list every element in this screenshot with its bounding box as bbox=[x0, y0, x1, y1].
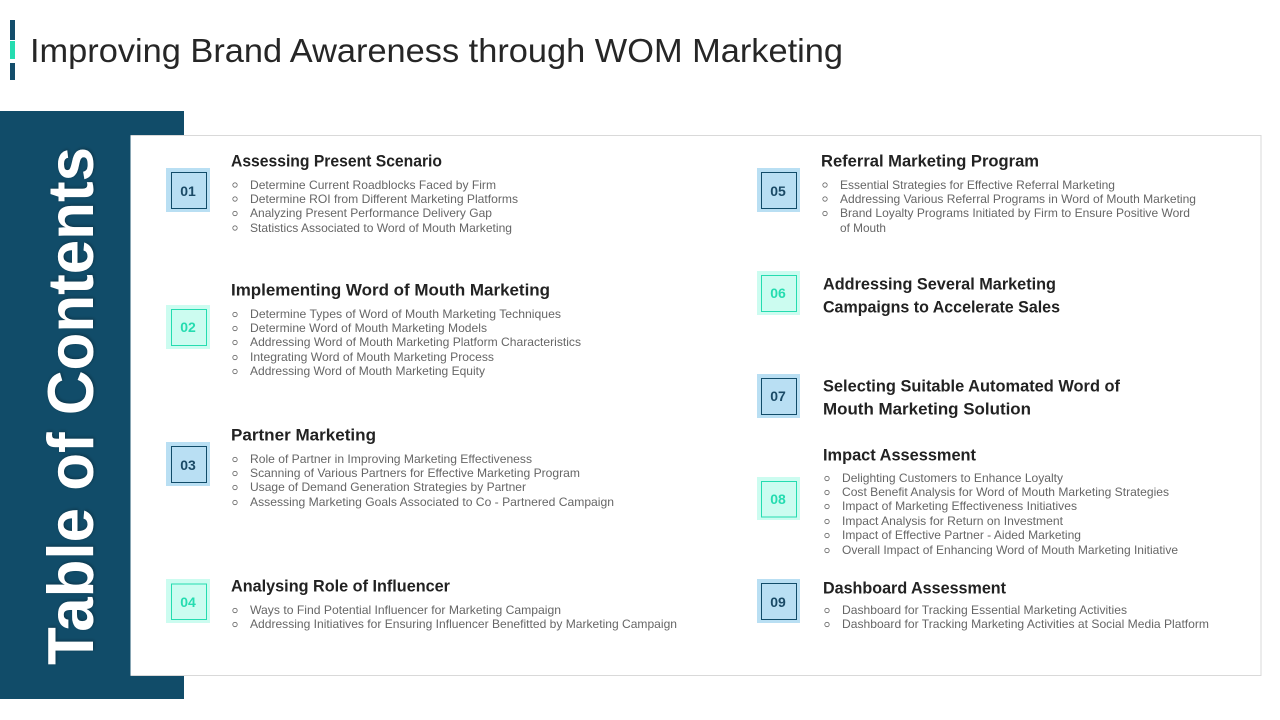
section 01 bbox=[166, 152, 518, 235]
section 08 bbox=[757, 446, 1178, 557]
heading 04: Analysing Role of Influencer bbox=[231, 576, 450, 596]
heading 06: Addressing Several Marketing bbox=[823, 274, 1056, 294]
title accent bar bbox=[10, 20, 15, 80]
heading 09: Dashboard Assessment bbox=[823, 578, 1006, 598]
badge 05: 05 bbox=[770, 183, 786, 199]
list 01: Determine Current Roadblocks Faced by Firm bbox=[250, 178, 496, 192]
list 01 bbox=[233, 178, 518, 235]
list 04: Ways to Find Potential Influencer for Marketing Campaign bbox=[250, 603, 561, 617]
list 04 bbox=[233, 603, 677, 631]
list 03 bbox=[233, 452, 614, 509]
list 08: Delighting Customers to Enhance Loyalty bbox=[842, 471, 1063, 485]
badge 04 bbox=[166, 579, 210, 623]
list 02: Addressing Word of Mouth Marketing Equity bbox=[250, 364, 485, 378]
content panel bbox=[130, 136, 1261, 676]
badge 05 bbox=[757, 168, 800, 212]
list 08: Cost Benefit Analysis for Word of Mouth Marketing Strategies bbox=[842, 485, 1169, 499]
badge 04: 04 bbox=[180, 594, 196, 610]
badge 06 bbox=[757, 271, 800, 315]
title: Improving Brand Awareness through WOM Marketing bbox=[30, 32, 843, 69]
list 03: Assessing Marketing Goals Associated to Co - Partnered Campaign bbox=[250, 495, 614, 509]
list 02: Addressing Word of Mouth Marketing Platform Characteristics bbox=[250, 335, 581, 349]
badge 03 bbox=[166, 442, 210, 486]
list 05: Brand Loyalty Programs Initiated by Firm to Ensure Positive Word bbox=[840, 206, 1190, 220]
heading 07: Selecting Suitable Automated Word of bbox=[823, 376, 1120, 396]
section 06 bbox=[757, 271, 1060, 316]
section 04 bbox=[166, 576, 677, 631]
list 05: of Mouth bbox=[840, 221, 886, 235]
list 03: Scanning of Various Partners for Effective Marketing Program bbox=[250, 466, 580, 480]
heading 02: Implementing Word of Mouth Marketing bbox=[231, 280, 550, 300]
section 02 bbox=[166, 280, 581, 378]
list 08 bbox=[825, 471, 1178, 557]
badge 08: 08 bbox=[770, 491, 786, 507]
list 09: Dashboard for Tracking Essential Marketing Activities bbox=[842, 603, 1127, 617]
heading 05: Referral Marketing Program bbox=[821, 152, 1039, 170]
heading 01: Assessing Present Scenario bbox=[231, 152, 442, 170]
heading 08: Impact Assessment bbox=[823, 446, 976, 464]
list 02 bbox=[233, 307, 581, 378]
section 09 bbox=[757, 578, 1209, 631]
list 08: Impact of Effective Partner - Aided Marketing bbox=[842, 528, 1081, 542]
heading 07 bbox=[823, 376, 1120, 418]
list 02: Integrating Word of Mouth Marketing Process bbox=[250, 350, 494, 364]
heading 06 bbox=[823, 274, 1060, 316]
sidebar heading: Table of Contents bbox=[34, 147, 107, 665]
list 01: Determine ROI from Different Marketing Platforms bbox=[250, 192, 518, 206]
list 02: Determine Word of Mouth Marketing Models bbox=[250, 321, 487, 335]
list 09 bbox=[825, 603, 1209, 631]
list 03: Role of Partner in Improving Marketing Effectiveness bbox=[250, 452, 532, 466]
list 09: Dashboard for Tracking Marketing Activities at Social Media Platform bbox=[842, 617, 1209, 631]
badge 07: 07 bbox=[770, 388, 786, 404]
list 08: Impact of Marketing Effectiveness Initiatives bbox=[842, 499, 1077, 513]
section 05 bbox=[757, 152, 1196, 235]
heading 07: Mouth Marketing Solution bbox=[823, 400, 1031, 418]
section 03 bbox=[166, 426, 614, 509]
badge 09 bbox=[757, 579, 800, 623]
badge 02 bbox=[166, 305, 210, 349]
list 05: Essential Strategies for Effective Referral Marketing bbox=[840, 178, 1115, 192]
list 01: Statistics Associated to Word of Mouth Marketing bbox=[250, 221, 512, 235]
list 03: Usage of Demand Generation Strategies by Partner bbox=[250, 480, 526, 494]
badge 07 bbox=[757, 374, 800, 418]
badge 09: 09 bbox=[770, 594, 786, 610]
badge 01 bbox=[166, 168, 210, 212]
list 08: Overall Impact of Enhancing Word of Mouth Marketing Initiative bbox=[842, 543, 1178, 557]
badge 03: 03 bbox=[180, 457, 196, 473]
list 04: Addressing Initiatives for Ensuring Influencer Benefitted by Marketing Campaign bbox=[250, 617, 677, 631]
heading 03: Partner Marketing bbox=[231, 426, 376, 444]
list 08: Impact Analysis for Return on Investment bbox=[842, 514, 1064, 528]
list 05: Addressing Various Referral Programs in Word of Mouth Marketing bbox=[840, 192, 1196, 206]
list 02: Determine Types of Word of Mouth Marketing Techniques bbox=[250, 307, 561, 321]
badge 08 bbox=[757, 477, 800, 520]
heading 06: Campaigns to Accelerate Sales bbox=[823, 298, 1060, 316]
badge 02: 02 bbox=[180, 319, 196, 335]
list 05 bbox=[823, 178, 1196, 235]
badge 01: 01 bbox=[180, 183, 196, 199]
badge 06: 06 bbox=[770, 285, 786, 301]
sidebar panel bbox=[0, 111, 184, 699]
list 01: Analyzing Present Performance Delivery Gap bbox=[250, 206, 492, 220]
section 07 bbox=[757, 374, 1120, 418]
